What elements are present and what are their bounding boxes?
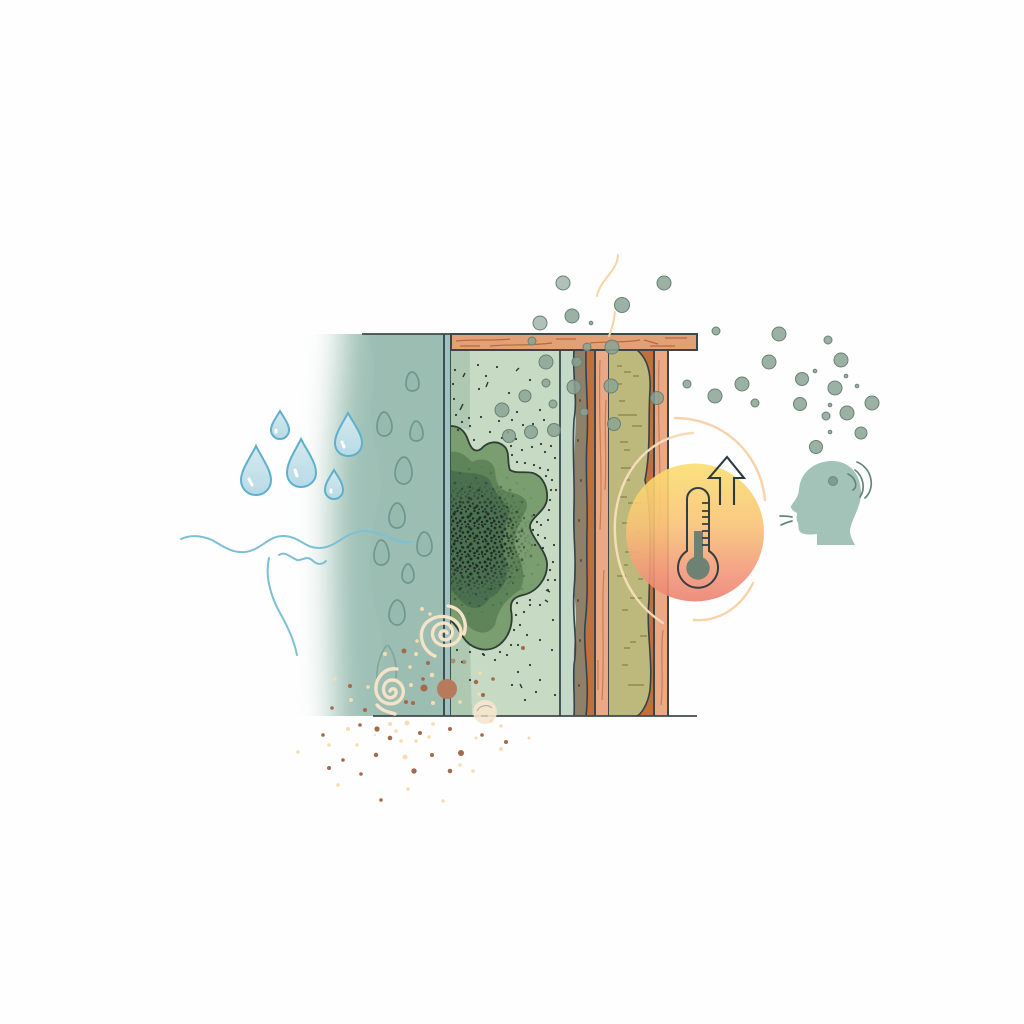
sound waves xyxy=(848,462,871,498)
droplet highlights xyxy=(249,430,344,492)
green airborne spores xyxy=(495,276,879,454)
panel: brown membrane and cavity layer xyxy=(573,350,596,716)
panel: damp exterior wall layer xyxy=(311,334,443,716)
mold colony xyxy=(450,425,548,650)
panel: top timber plate xyxy=(451,334,697,350)
scattered mold specks xyxy=(453,365,556,700)
icon: cream spore disc xyxy=(473,700,497,724)
heat radiation arcs xyxy=(615,418,765,623)
rising warm air wisp xyxy=(597,255,618,336)
panel: wood stud right xyxy=(654,350,668,716)
mold spore speckle xyxy=(451,467,540,614)
brown dust particles xyxy=(321,646,525,802)
panel: insulation batt xyxy=(609,350,654,716)
icon: up arrow xyxy=(709,457,744,505)
icon: spiral spore small xyxy=(376,669,403,714)
panel: drywall layer xyxy=(451,350,582,716)
panel: wood stud left xyxy=(595,350,609,716)
water flow lines xyxy=(181,531,412,655)
rain droplets xyxy=(241,411,362,499)
icon: large brown spore xyxy=(437,679,457,699)
icon: spiral spore large xyxy=(421,606,465,656)
breath marks xyxy=(780,516,792,525)
wall condensation droplets xyxy=(374,372,432,682)
infographic: wall cross-section xyxy=(180,254,880,803)
icon: thermometer xyxy=(678,488,718,588)
icon: human head xyxy=(780,461,871,545)
heat circle xyxy=(626,464,764,602)
panel: sheathing strip xyxy=(444,334,451,716)
top and bottom boundary lines xyxy=(362,334,697,716)
cream dust particles xyxy=(296,607,530,803)
